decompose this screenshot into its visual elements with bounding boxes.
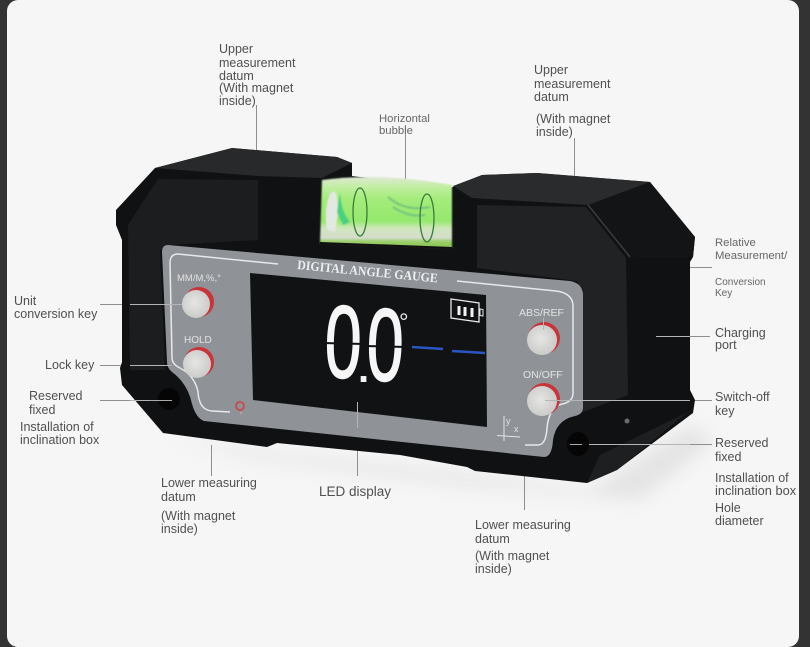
label: lower measuring datum right: [475, 518, 571, 576]
left front face: [128, 179, 258, 370]
label: charging port: port: [715, 338, 737, 352]
gauge body: [116, 148, 695, 483]
label: upper measurement datum left: Upper: [219, 42, 253, 56]
label: lower measuring datum left: datum: [161, 490, 196, 504]
LED display: [250, 273, 487, 427]
label: charging port: [715, 326, 766, 352]
left block top face: [155, 148, 352, 178]
label: relative measurement: [715, 237, 788, 299]
label: lock key: Lock key: [45, 358, 95, 372]
white trim line left: [170, 254, 278, 412]
reading: 0: [323, 285, 363, 401]
label: lower measuring datum right: Lower measuring: [475, 518, 571, 532]
mounting hole left: [158, 388, 180, 410]
redrawn leader overlays on product: [130, 304, 690, 444]
label: reserved fixed left: fixed: [29, 403, 55, 417]
label: upper measurement datum right: [534, 63, 611, 139]
button: ABS/REF: ABS/REF: [519, 307, 564, 319]
label: horizontal bubble: bubble: [379, 125, 413, 137]
LED display: 0: [365, 288, 405, 404]
shadow under gauge: [170, 425, 715, 500]
decimal point: .: [358, 347, 369, 391]
label: upper measurement datum right: measurement: [534, 77, 611, 91]
battery icon: [451, 299, 483, 322]
label: unit conversion key: conversion key: [14, 307, 98, 321]
icon: xy axes: y: [506, 416, 511, 426]
right inset face: [477, 205, 628, 412]
label: reserved fixed left: inclination box: [20, 433, 100, 447]
button: unit conversion: MM/M,%,°: [177, 273, 221, 284]
button: ABS/REF: [519, 307, 564, 355]
label: lower measuring datum left: inside): [161, 522, 198, 536]
small side screw: [624, 418, 630, 424]
label: unit conversion key: [14, 294, 98, 321]
label: reserved fixed right: Hole: [715, 501, 741, 515]
label: reserved fixed left: Reserved: [29, 389, 83, 403]
mounting hole right: [567, 432, 589, 456]
label: reserved fixed right: inclination box: [715, 483, 797, 498]
hole leader tips: [150, 400, 582, 444]
label: upper measurement datum right: datum: [534, 90, 569, 104]
label: switch-off key: [715, 390, 770, 418]
label: lower measuring datum right: datum: [475, 532, 510, 546]
label: lower measuring datum right: inside): [475, 562, 512, 576]
label: reserved fixed right: [715, 436, 797, 528]
white trim line right: [457, 281, 573, 445]
label: lower measuring datum right: (With magnet: [475, 549, 550, 563]
icon: power indicator: [236, 402, 244, 414]
label: upper measurement datum right: Upper: [534, 63, 568, 77]
label: charging port: Charging: [715, 326, 766, 340]
panel heading: DIGITAL ANGLE GAUGE: [297, 257, 439, 286]
button: unit conversion: [177, 273, 221, 318]
button: hold: HOLD: [184, 335, 212, 346]
label: upper measurement datum left: (With magnet: [219, 81, 294, 95]
label: reserved fixed left: Installation of: [20, 420, 94, 434]
label: upper measurement datum left: datum: [219, 69, 254, 83]
icon: xy axes: [497, 416, 520, 441]
lower right chamfer: [587, 412, 688, 483]
label: upper measurement datum right: inside): [536, 125, 573, 139]
label: lower measuring datum left: [161, 476, 257, 536]
degree sign: °: [399, 309, 409, 336]
chamfer highlight: [588, 205, 630, 257]
button: ON/OFF: [523, 369, 563, 416]
label: relative measurement: Relative: [715, 237, 756, 249]
label: reserved fixed right: fixed: [715, 450, 741, 464]
button: ON/OFF: ON/OFF: [523, 369, 563, 381]
label: relative measurement: Key: [715, 288, 732, 299]
label: relative measurement: Measurement/: [715, 250, 788, 262]
label: horizontal bubble: Horizontal: [379, 113, 430, 125]
label: reserved fixed right: Installation of: [715, 471, 789, 485]
icon: xy axes: x: [514, 424, 519, 434]
label: upper measurement datum right: (With magnet: [536, 112, 611, 126]
body silhouette: [116, 148, 695, 483]
control panel: [162, 245, 583, 457]
right block top face: [453, 173, 650, 205]
segment gaps: [322, 343, 406, 347]
label: LED display: LED display: [319, 484, 391, 499]
label: upper measurement datum left: measurement: [219, 56, 296, 70]
label: lower measuring datum left: Lower measuring: [161, 476, 257, 490]
label: switch-off key: Switch-off: [715, 390, 770, 404]
label: relative measurement: Conversion: [715, 277, 766, 288]
horizontal bubble vial: [320, 177, 452, 248]
label: unit conversion key: Unit: [14, 294, 37, 308]
right chamfer face: [588, 182, 695, 258]
label: reserved fixed right: diameter: [715, 514, 764, 528]
label: horizontal bubble: [379, 113, 430, 137]
blue dashes: [412, 347, 485, 353]
label: reserved fixed left: [20, 389, 100, 447]
button: hold: [183, 335, 214, 378]
label: upper measurement datum left: [219, 42, 296, 108]
label: lower measuring datum left: (With magnet: [161, 509, 236, 523]
leader lines: [100, 105, 712, 510]
label: switch-off key: key: [715, 404, 735, 418]
label: upper measurement datum left: inside): [219, 94, 256, 108]
label: reserved fixed right: Reserved: [715, 436, 769, 450]
